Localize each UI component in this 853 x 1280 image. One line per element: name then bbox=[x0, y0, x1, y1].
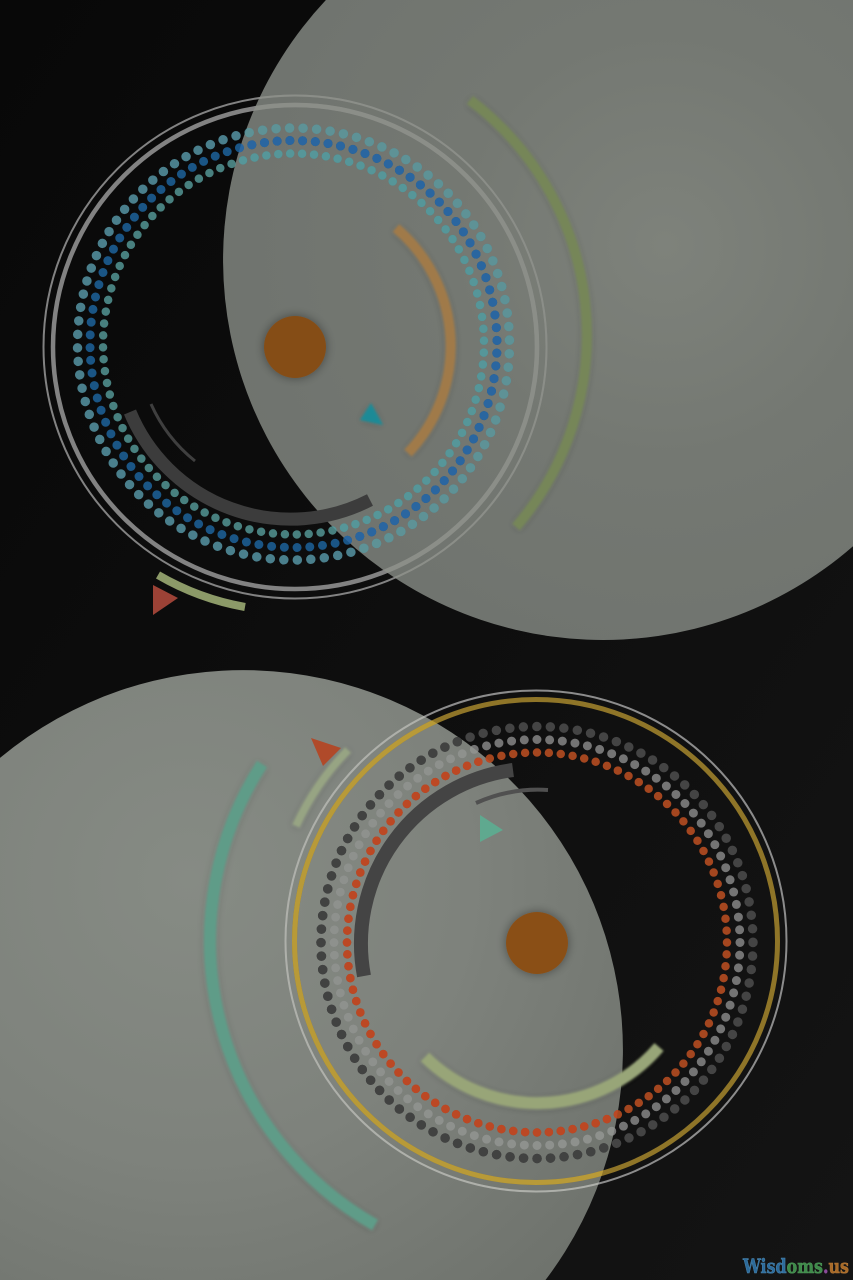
watermark: Wisdoms.us bbox=[742, 1254, 849, 1278]
bottom outer rings bbox=[286, 690, 786, 1192]
thin dark arc bbox=[151, 404, 195, 461]
top outer rings over disc bbox=[254, 94, 548, 578]
orange centre disc bbox=[264, 316, 326, 378]
bottom dotted rings over disc bbox=[316, 737, 618, 1164]
red triangle bbox=[153, 585, 178, 615]
top ring system bbox=[44, 96, 587, 615]
light green arc bbox=[425, 1047, 659, 1103]
top dotted rings over disc bbox=[234, 123, 514, 553]
teal triangle bbox=[360, 403, 383, 425]
bottom ring system bbox=[210, 690, 786, 1225]
teal triangle bbox=[480, 815, 503, 842]
bottom outer rings over disc bbox=[284, 716, 604, 1192]
top outer rings bbox=[44, 96, 546, 598]
olive arc, right bbox=[470, 100, 587, 527]
red triangle bbox=[311, 738, 341, 766]
green small arc bbox=[158, 575, 245, 607]
dark arc bbox=[361, 770, 513, 976]
large light disc: top right bbox=[223, 0, 853, 640]
large light disc: bottom left bbox=[0, 670, 623, 1280]
thin dark arc bbox=[476, 790, 548, 803]
pale olive arc bbox=[296, 750, 348, 826]
dark arc bbox=[130, 412, 370, 519]
bottom dotted rings bbox=[321, 726, 753, 1158]
top dotted rings bbox=[74, 124, 513, 564]
orange arc bbox=[396, 228, 451, 453]
teal arc, left bbox=[210, 764, 375, 1225]
orange centre disc bbox=[506, 912, 568, 974]
